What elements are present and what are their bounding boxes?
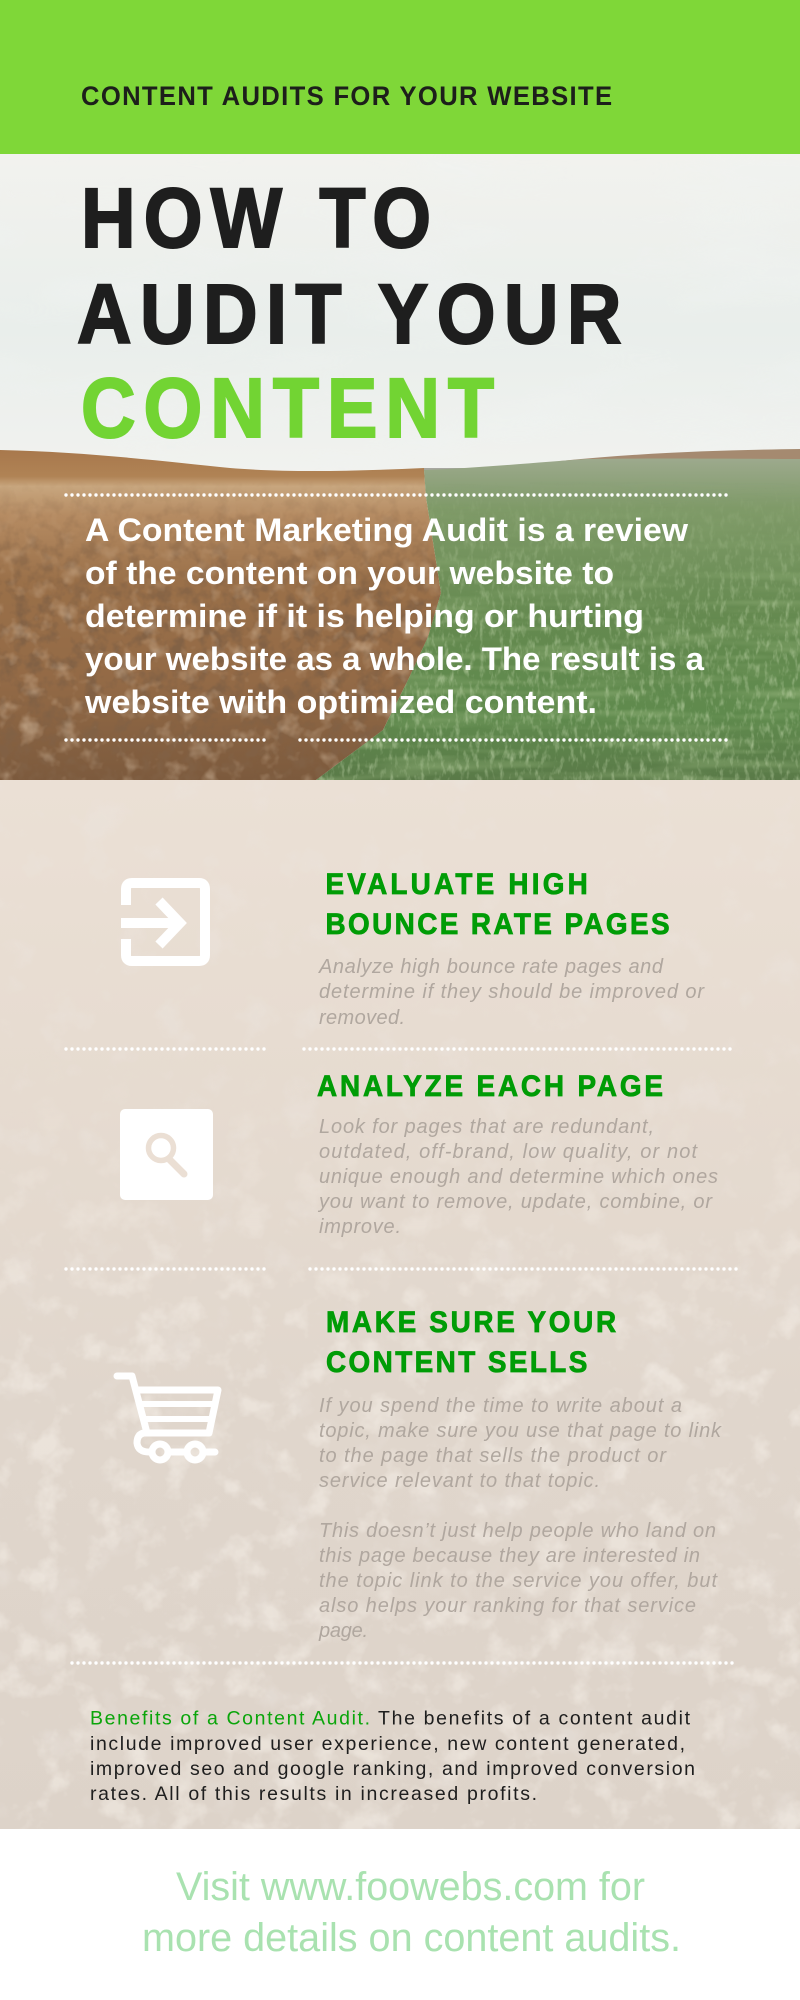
body: evaluate (318, 956, 705, 1029)
body: make sure: to the page that sells the product or (319, 1445, 667, 1467)
icon: magnifier on page (120, 1109, 213, 1200)
benefits paragraph: include improved user experience, new content generated, (90, 1733, 685, 1755)
benefits paragraph: improved seo and google ranking, and improved conversion (90, 1758, 695, 1780)
body: make sure: page. (318, 1620, 368, 1642)
footer call to action: Visit www.foowebs.com for (176, 1865, 645, 1909)
intro paragraph: A Content Marketing Audit is a review (85, 512, 688, 548)
body: analyze: outdated, off-brand, low quality, or not (319, 1141, 698, 1163)
heading: evaluate: BOUNCE RATE PAGES (326, 908, 670, 941)
body: analyze: Look for pages that are redundant, (319, 1116, 654, 1138)
icon: shopping cart (117, 1376, 218, 1460)
main title: CONTENT (81, 361, 494, 455)
icon: exit arrow box (121, 883, 205, 961)
heading: make sure (326, 1306, 616, 1379)
benefits paragraph (90, 1708, 695, 1805)
intro paragraph (84, 512, 704, 720)
body: make sure: topic, make sure you use that page to link (319, 1420, 722, 1442)
body: make sure: If you spend the time to write about a (319, 1395, 682, 1417)
footer call to action (142, 1865, 681, 1960)
header band (0, 0, 800, 154)
benefits paragraph: The benefits of a content audit (378, 1708, 691, 1730)
heading: make sure: CONTENT SELLS (326, 1346, 587, 1379)
footer call to action: more details on content audits. (142, 1916, 681, 1960)
intro paragraph: your website as a whole. The result is a (85, 641, 704, 677)
step 2: analyze each page (120, 1070, 718, 1238)
main title (77, 171, 622, 455)
body: make sure: the topic link to the service you offer, but (319, 1570, 718, 1592)
main title: AUDIT YOUR (77, 267, 622, 361)
heading: evaluate (326, 868, 670, 941)
benefits paragraph: rates. All of this results in increased profits. (90, 1783, 537, 1805)
body: evaluate: removed. (319, 1007, 405, 1029)
body: make sure: this page because they are interested in (319, 1545, 700, 1567)
body: analyze (317, 1116, 718, 1238)
body: analyze: unique enough and determine which ones (319, 1166, 718, 1188)
body: make sure (318, 1395, 722, 1642)
panel: textured cream background (0, 780, 800, 1829)
heading: analyze: ANALYZE EACH PAGE (317, 1070, 663, 1103)
body: make sure: service relevant to that topic. (319, 1470, 600, 1492)
main title: HOW TO (81, 171, 431, 265)
body: make sure: also helps your ranking for that service (319, 1595, 696, 1617)
benefits paragraph: Benefits of a Content Audit. (90, 1708, 370, 1730)
header title: CONTENT AUDITS FOR YOUR WEBSITE (81, 80, 612, 111)
heading: make sure: MAKE SURE YOUR (326, 1306, 616, 1339)
hero photo: sky over split field (0, 154, 800, 780)
body: analyze: improve. (319, 1216, 401, 1238)
body: make sure: This doesn’t just help people who land on (319, 1520, 716, 1542)
step 3: make sure your content sells (117, 1306, 722, 1642)
intro paragraph: website with optimized content. (84, 684, 597, 720)
intro paragraph: of the content on your website to (85, 555, 614, 591)
step 1: evaluate high bounce rate pages (121, 868, 705, 1029)
heading: evaluate: EVALUATE HIGH (326, 868, 588, 901)
body: evaluate: Analyze high bounce rate pages and (318, 956, 664, 978)
body: analyze: you want to remove, update, combine, or (317, 1191, 713, 1213)
body: evaluate: determine if they should be improved or (319, 981, 705, 1003)
intro paragraph: determine if it is helping or hurting (85, 598, 644, 634)
